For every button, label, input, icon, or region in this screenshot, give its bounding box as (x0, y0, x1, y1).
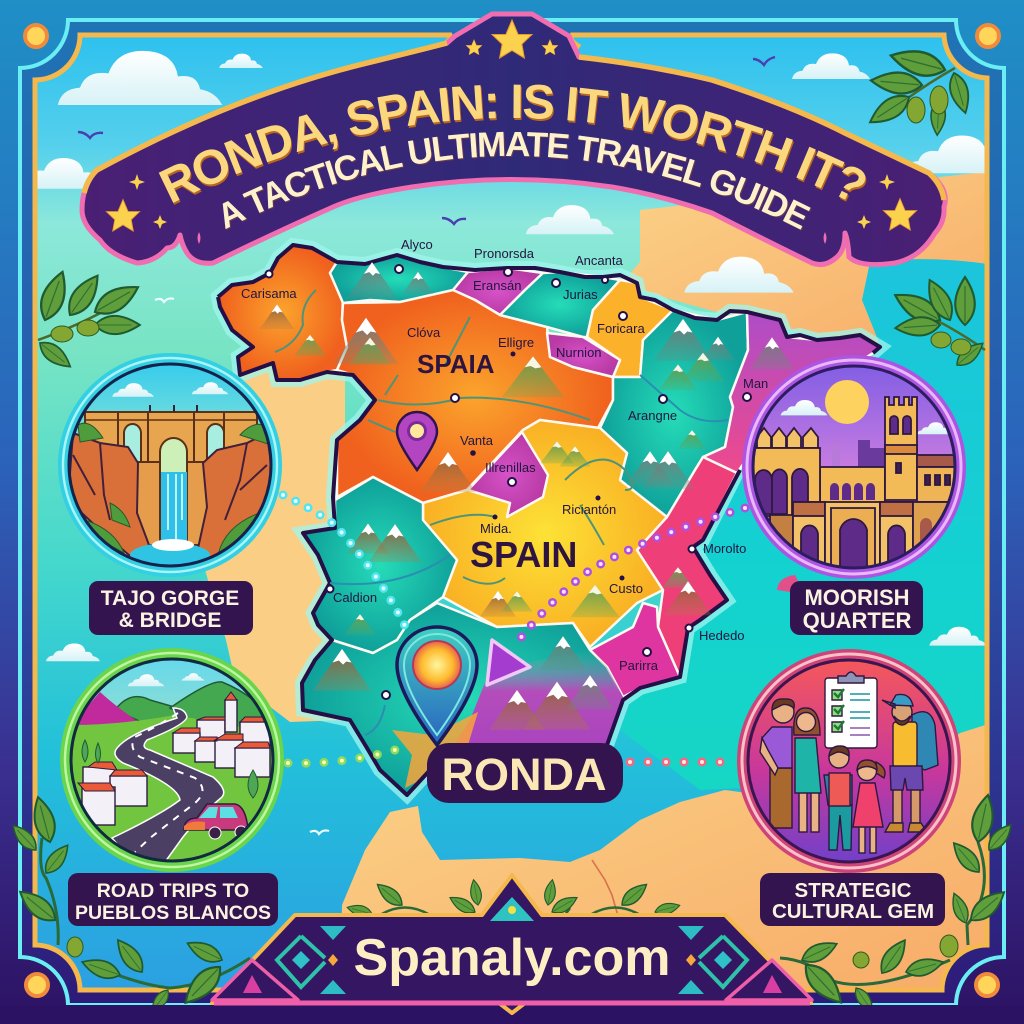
map city markers and labels: Carisama (241, 286, 297, 301)
illustration: Tajo gorge and bridge (60, 358, 280, 575)
coast glow (218, 245, 880, 795)
banner top gold edge (84, 43, 944, 200)
map city markers and labels (241, 237, 768, 699)
map city markers and labels: Morolto (703, 541, 746, 556)
label: strategic cultural gem (760, 873, 945, 926)
dotted connector: family (630, 758, 738, 766)
map detail: rivers (275, 290, 728, 735)
boy (824, 746, 852, 850)
map city markers and labels: Jurias (563, 287, 598, 302)
map city markers and labels: Riciantón (562, 502, 616, 517)
label: Moorish quarter: MOORISH (804, 585, 910, 610)
purple south highlands (440, 650, 623, 768)
map city markers and labels: Nurnion (556, 345, 602, 360)
Ronda location pin (397, 627, 477, 745)
olive branch right (890, 276, 987, 370)
vine bottom right (780, 793, 1016, 1015)
map city markers and labels: Elligre (498, 335, 534, 350)
olive branch left (35, 268, 143, 373)
clouds (15, 51, 1017, 661)
map city markers and labels: Mida. (480, 521, 512, 536)
map of Spain (218, 245, 880, 795)
mother (794, 708, 821, 832)
map city markers and labels: Eransán (473, 278, 521, 293)
map city markers and labels: Man (743, 376, 768, 391)
title line 2: A TACTICAL ULTIMATE TRAVEL GUIDE (222, 132, 812, 230)
label: Tajo gorge: TAJO GORGE (101, 587, 239, 610)
website name: Spanaly.com (354, 929, 670, 987)
sunburst behind Ronda (392, 712, 478, 788)
leaves behind brand banner (346, 879, 681, 919)
dotted connector: Moorish quarter (515, 508, 745, 645)
map coastline (218, 245, 880, 795)
map city markers and labels: Parirra (619, 658, 659, 673)
map city markers and labels: Alyco (401, 237, 433, 252)
map country labels: SPAIN (470, 534, 577, 575)
label: strategic cultural gem: STRATEGIC (795, 879, 912, 902)
label: Moorish quarter (790, 581, 923, 635)
map city markers and labels: Illrenillas (485, 460, 536, 475)
banner ornaments (243, 975, 782, 993)
label: Moorish quarter: QUARTER (803, 608, 911, 633)
dotted connector: gorge (283, 495, 407, 630)
map country labels (417, 349, 577, 575)
illustration: family with checklist (742, 654, 956, 868)
map city markers and labels: Caldion (333, 590, 377, 605)
banner stars (106, 20, 917, 244)
title line 1: RONDA, SPAIN: IS IT WORTH IT? (158, 84, 866, 205)
map city markers and labels: Ancanta (575, 253, 623, 268)
illustration: road trips (65, 653, 285, 870)
father (760, 699, 794, 828)
map city markers and labels: Pronorsda (474, 246, 535, 261)
illustration: Moorish quarter (745, 358, 965, 578)
bottom brand banner (0, 875, 1024, 1024)
Ronda label: RONDA (442, 749, 606, 800)
regions (218, 245, 880, 795)
girl (853, 760, 885, 853)
map city markers and labels: Custo (609, 581, 643, 596)
label: road trips: PUEBLOS BLANCOS (75, 902, 271, 924)
small map pin (397, 412, 437, 470)
map country labels: SPAIA (417, 349, 495, 379)
map city markers and labels: Vanta (460, 433, 494, 448)
map city markers and labels: Arangne (628, 408, 677, 423)
dotted connector: road trips (288, 746, 408, 763)
checklist (825, 672, 877, 748)
label: strategic cultural gem: CULTURAL GEM (772, 900, 934, 923)
map city markers and labels: Foricara (597, 321, 645, 336)
map city markers and labels: Clóva (407, 325, 441, 340)
vine bottom left (8, 795, 250, 1015)
hiker (882, 694, 938, 832)
label: road trips: ROAD TRIPS TO (97, 880, 249, 902)
map detail: mountains (260, 262, 794, 730)
map city markers and labels: Hededo (699, 628, 745, 643)
pink islet near Moorish label (777, 575, 800, 592)
label: Tajo gorge: & BRIDGE (119, 609, 221, 632)
olive branch top right (865, 45, 974, 136)
label: road trips (68, 873, 278, 926)
title banner (80, 12, 948, 268)
birds (78, 57, 775, 834)
label: Tajo gorge (89, 581, 253, 635)
arrowhead (487, 640, 530, 685)
